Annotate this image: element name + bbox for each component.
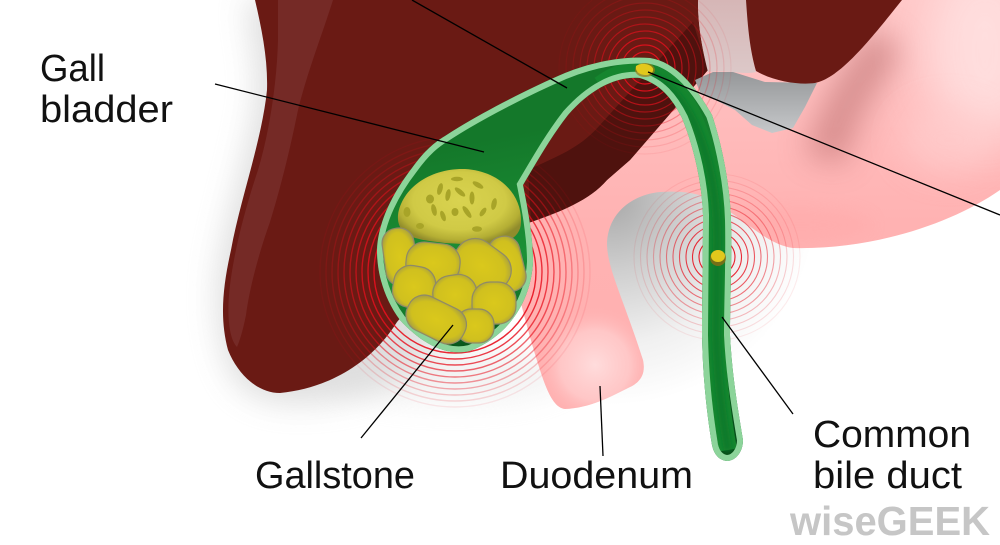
grey recess (695, 72, 817, 133)
leader lines (215, 0, 1000, 456)
liver (223, 0, 708, 393)
duct centre shading (640, 72, 728, 450)
rim of bladder and duct (377, 58, 743, 461)
watermark: wiseGEEK: wiseGEEK (789, 498, 990, 544)
pain ripples: gall bladder (320, 137, 590, 407)
lower shadow under gall bladder (330, 347, 570, 403)
pain ripples: duct arch (559, 0, 731, 154)
stone pits (404, 177, 498, 232)
duct body (600, 71, 728, 450)
liver right lobe (746, 0, 902, 84)
label: Common bile duct: bile duct (813, 455, 962, 497)
label: Common bile duct: Common (813, 414, 971, 456)
small gallstones (380, 226, 529, 350)
label: Gall bladder: Gall (40, 48, 105, 90)
label: Gallstone: Gallstone (255, 455, 415, 497)
upper lobe band (698, 0, 756, 73)
liver shadow (217, 0, 440, 404)
large pitted gallstone (398, 169, 521, 245)
grey cavity behind duodenum (600, 185, 860, 430)
liver highlight (228, 0, 333, 347)
stone in bile duct (710, 250, 726, 266)
label: Duodenum: Duodenum (500, 455, 693, 497)
label: Gall bladder: bladder (40, 89, 173, 131)
pain ripples: bile duct (634, 174, 800, 340)
stone in duct arch (635, 63, 655, 77)
liver shaded fold (528, 22, 708, 222)
gall bladder and common bile duct (370, 50, 750, 465)
panel: stomach and duodenum (500, 0, 1000, 422)
